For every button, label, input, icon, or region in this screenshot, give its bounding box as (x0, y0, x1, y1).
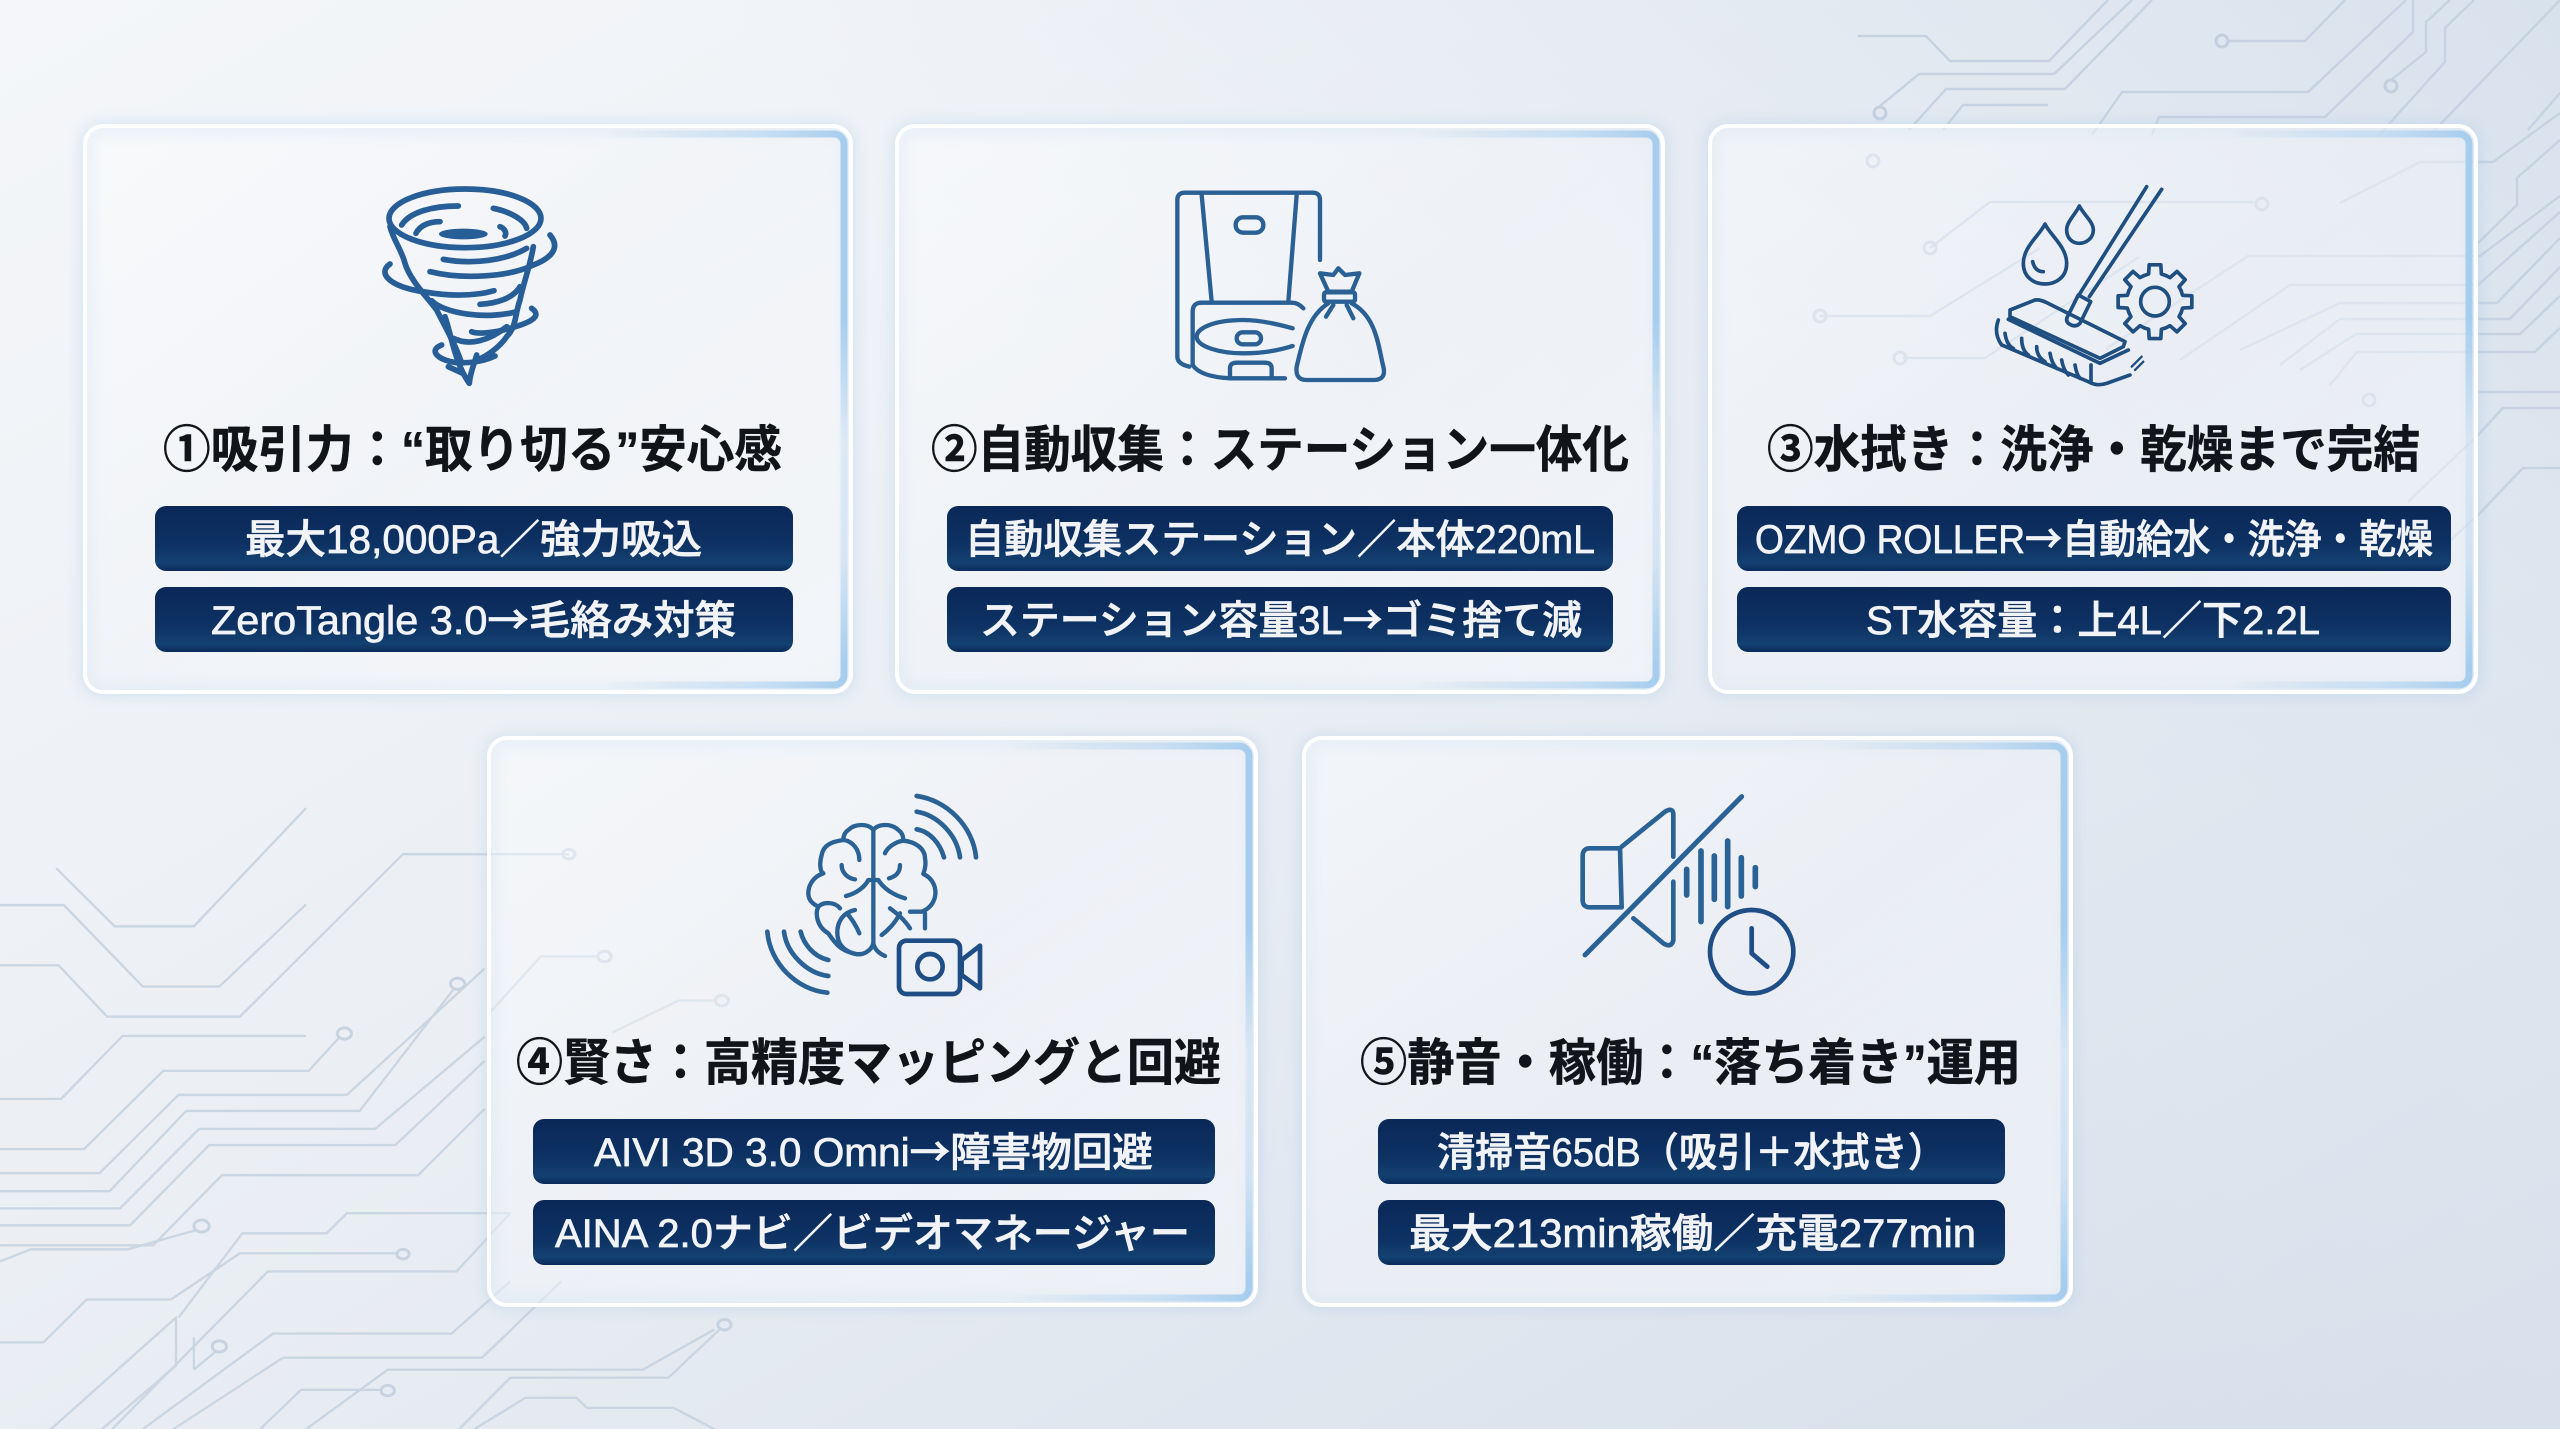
circuit pattern: top right (1814, 0, 2560, 550)
heading: ①吸引力：“取り切る”安心感 (163, 422, 782, 478)
panel: auto collection (897, 126, 1663, 692)
circuit pattern: bottom left (0, 808, 731, 1429)
panel: intelligence (489, 738, 1256, 1305)
panel: quiet operation (1304, 738, 2071, 1305)
icon: dock station and bag (1177, 193, 1384, 380)
card frame (897, 126, 1663, 692)
pill: runtime: 最大213min稼働／充電277min (1409, 1212, 1976, 1256)
pill: runtime (1378, 1200, 2005, 1265)
heading: ②自動収集：ステーション一体化 (931, 422, 1629, 478)
icon: brain, signals and camera (767, 796, 980, 994)
pill: station: 自動収集ステーション／本体220mL (965, 518, 1595, 562)
icon part: gear (2118, 265, 2192, 339)
heading: ④賢さ：高精度マッピングと回避 (516, 1035, 1221, 1091)
pill: noise level (1378, 1119, 2005, 1184)
heading: ③水拭き：洗浄・乾燥まで完結 (1767, 422, 2420, 478)
heading: ⑤静音・稼働：“落ち着き”運用 (1360, 1035, 2021, 1091)
pill: max suction: 最大18,000Pa／強力吸込 (245, 518, 702, 562)
icon: tornado (385, 189, 555, 383)
pill: ozmo roller: OZMO ROLLER→自動給水・洗浄・乾燥 (1755, 507, 2433, 565)
icon: mop, drops and gear (1996, 187, 2192, 385)
pill: aivi: AIVI 3D 3.0 Omni→障害物回避 (594, 1120, 1153, 1178)
pill: water capacity (1737, 587, 2451, 652)
pill: station (947, 506, 1613, 571)
pill: capacity: ステーション容量3L→ゴミ捨て減 (980, 588, 1582, 646)
pill: aina (533, 1200, 1215, 1265)
pill: zerotangle: ZeroTangle 3.0→毛絡み対策 (211, 588, 736, 646)
pill: aina: AINA 2.0ナビ／ビデオマネージャー (555, 1212, 1190, 1256)
pill: max suction (155, 506, 793, 571)
panel: suction (85, 126, 851, 692)
card frame (1304, 738, 2071, 1305)
icon: muted speaker and clock (1583, 797, 1793, 993)
card frame (85, 126, 851, 692)
card frame (1710, 126, 2476, 692)
panel: mopping (1710, 126, 2476, 692)
pill: water capacity: ST水容量：上4L／下2.2L (1866, 599, 2320, 643)
pill: noise level: 清掃音65dB（吸引＋水拭き） (1437, 1131, 1946, 1175)
card frame (489, 738, 1256, 1305)
